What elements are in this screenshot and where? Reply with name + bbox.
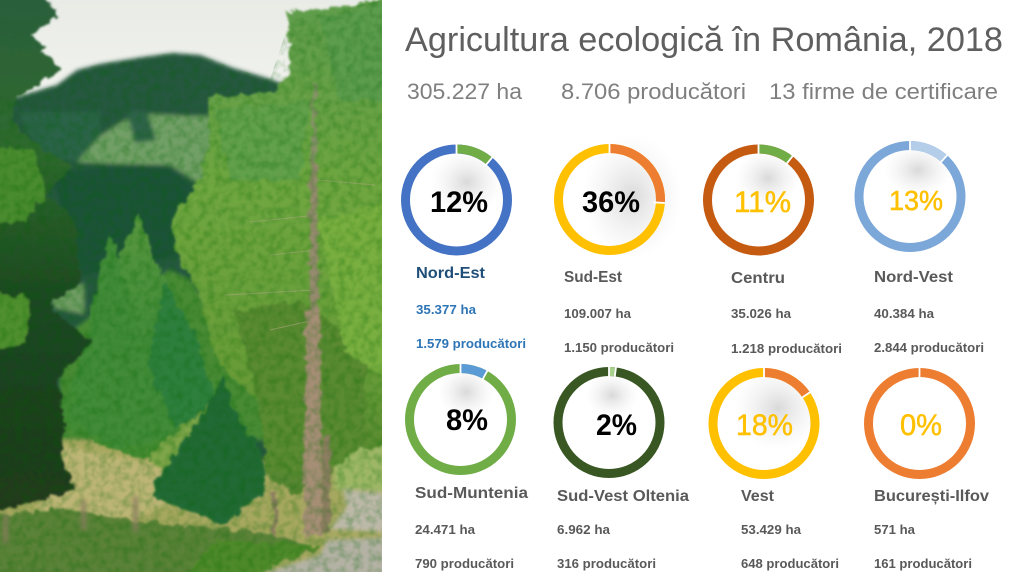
mid grove conifers	[70, 214, 214, 471]
field	[0, 436, 382, 572]
donut: Sud-Muntenia 8%	[410, 362, 512, 470]
donut: Centru 11%	[708, 142, 810, 251]
panel: Sud-Muntenia	[410, 362, 528, 571]
photo: mountain forest landscape	[0, 0, 400, 576]
area: 571 ha	[874, 522, 916, 537]
producers: 1.579 producători	[416, 336, 526, 351]
name: Nord-Est	[416, 265, 486, 282]
panel: Nord-Est	[406, 142, 526, 351]
area: 24.471 ha	[415, 522, 476, 537]
certification firms: 13 firme de certificare	[769, 79, 998, 104]
grove backing	[60, 270, 280, 440]
name: Sud-Muntenia	[415, 485, 528, 502]
left forest under ridge	[23, 114, 98, 158]
donut: București-Ilfov 0%	[868, 366, 970, 474]
panel: Sud-Est	[558, 135, 682, 355]
summary figures	[407, 79, 998, 104]
panel: Nord-Vest	[859, 139, 984, 355]
area: 40.384 ha	[874, 306, 935, 321]
donut: Centru 11%: 11%	[734, 186, 791, 219]
donut: Sud-Est 36%: 36%	[582, 186, 640, 219]
donut: Nord-Est 12%: 12%	[430, 186, 488, 219]
donut: Nord-Vest 13%: 13%	[889, 185, 943, 216]
sky	[25, 0, 378, 94]
area: 35.026 ha	[731, 306, 792, 321]
producers: 790 producători	[415, 556, 514, 571]
tree trunks	[272, 85, 331, 540]
area: 35.377 ha	[416, 302, 477, 317]
foreground shrubs	[0, 508, 320, 576]
producers: 316 producători	[557, 556, 656, 571]
donut: Nord-Vest 13%	[859, 139, 961, 248]
producers: 161 producători	[874, 556, 972, 571]
producers: 648 producători	[741, 556, 839, 571]
donut: Sud-Est 36%	[558, 135, 682, 259]
total area: 305.227 ha	[407, 79, 522, 104]
donut: Sud-Vest Oltenia 2%	[558, 365, 660, 474]
name: Centru	[731, 270, 785, 287]
panel: Centru	[708, 142, 842, 356]
small foreground fir	[153, 375, 267, 525]
donut: Vest 18%	[713, 366, 822, 474]
area: 6.962 ha	[557, 522, 611, 537]
donut: București-Ilfov 0%: 0%	[900, 409, 942, 442]
producers: 2.844 producători	[874, 340, 984, 355]
donut: Nord-Est 12%	[406, 142, 508, 251]
donut: Sud-Muntenia 8%: 8%	[446, 404, 488, 437]
donut: Sud-Vest Oltenia 2%: 2%	[596, 409, 637, 442]
donut: Vest 18%: 18%	[736, 409, 793, 442]
area: 53.429 ha	[741, 522, 802, 537]
title: Agricultura ecologică în România, 2018	[405, 21, 1003, 59]
name: Sud-Vest Oltenia	[557, 488, 689, 505]
producers: 1.150 producători	[564, 340, 674, 355]
panel: Sud-Vest Oltenia	[557, 365, 689, 571]
right tree bare branches	[225, 180, 375, 330]
right large conifer	[173, 0, 395, 496]
panel: Vest	[713, 366, 839, 571]
area: 109.007 ha	[564, 306, 632, 321]
name: Sud-Est	[564, 269, 623, 286]
panel: București-Ilfov	[868, 366, 989, 571]
lower forest	[56, 168, 192, 274]
meadow on the hill	[76, 111, 212, 184]
producers: 1.218 producători	[731, 341, 842, 356]
small meadow	[47, 284, 84, 314]
fence posts	[3, 496, 138, 544]
foliage texture	[0, 0, 382, 572]
forested hill	[10, 50, 283, 464]
forest patch in meadow	[127, 112, 156, 143]
name: București-Ilfov	[874, 488, 989, 505]
road	[260, 487, 382, 572]
name: Vest	[741, 488, 775, 505]
left dark conifer	[0, 0, 93, 510]
total producers: 8.706 producători	[561, 79, 746, 104]
name: Nord-Vest	[874, 269, 954, 286]
